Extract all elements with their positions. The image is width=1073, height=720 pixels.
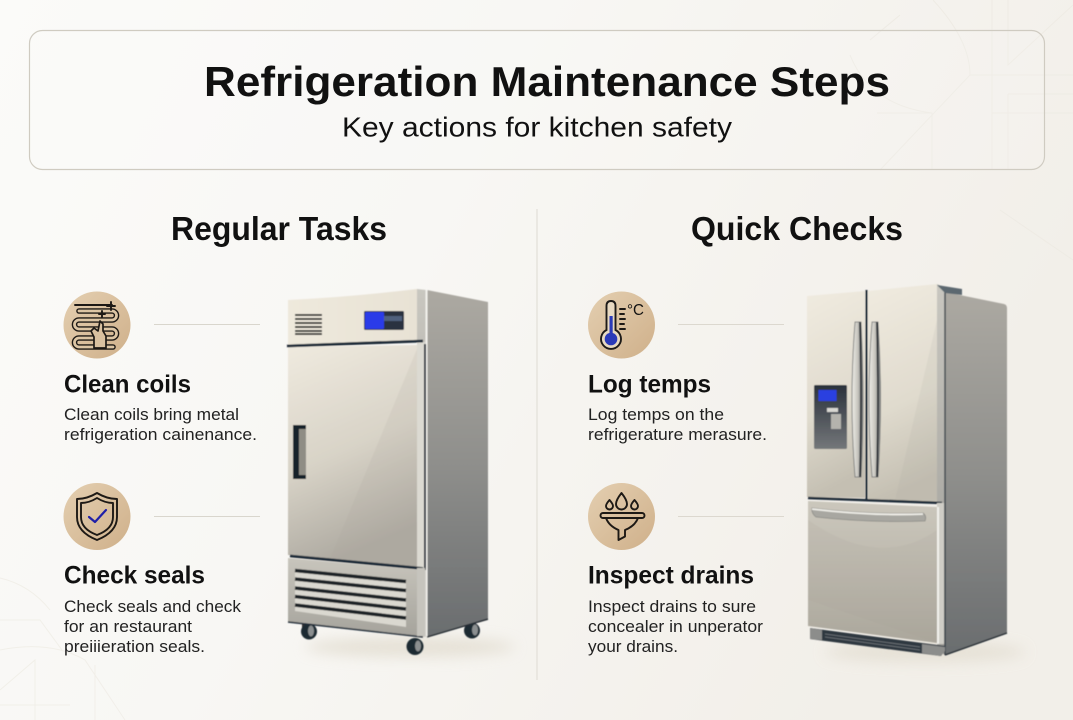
icon: shield with check xyxy=(64,483,130,550)
drawer handle xyxy=(812,508,926,522)
item title: Clean coils xyxy=(64,370,191,398)
item: Clean coils xyxy=(64,292,260,444)
icon: thermometer xyxy=(588,292,655,358)
horizontal divider xyxy=(808,498,942,503)
item description: Check seals and check xyxy=(64,598,242,616)
door handles xyxy=(852,322,880,477)
background line pattern: right xyxy=(1000,210,1073,260)
vent xyxy=(295,315,322,334)
icon: coils and hand xyxy=(64,292,130,358)
casters xyxy=(301,620,480,655)
connector line xyxy=(154,516,260,517)
item: Inspect drains xyxy=(588,483,784,656)
heading: Regular Tasks: Regular Tasks xyxy=(171,210,387,247)
heading: Quick Checks: Quick Checks xyxy=(691,210,903,247)
top panel xyxy=(288,289,417,346)
item description: for an restaurant xyxy=(64,618,192,636)
side panel xyxy=(427,290,488,637)
side panel xyxy=(945,292,1007,655)
centre divider xyxy=(536,209,538,680)
door handle xyxy=(293,425,306,479)
item: Log temps xyxy=(588,292,784,444)
item description: Inspect drains to sure xyxy=(588,598,756,616)
connector line xyxy=(154,324,260,325)
control display xyxy=(364,311,404,330)
item description: concealer in unperator xyxy=(588,618,764,636)
right upper door xyxy=(868,284,937,502)
title panel xyxy=(30,30,1044,170)
left upper door xyxy=(807,291,865,498)
item: Check seals xyxy=(64,483,260,656)
icon: drain funnel and drops xyxy=(588,483,655,550)
title: Refrigeration Maintenance Steps xyxy=(204,58,890,105)
illustration: french door refrigerator xyxy=(807,284,1025,662)
background line pattern: top right xyxy=(850,0,1073,170)
connector line xyxy=(678,516,784,517)
item description: Log temps on the xyxy=(588,406,724,424)
lower grille panel xyxy=(288,558,423,637)
item description: refrigerature merasure. xyxy=(588,426,767,444)
lower drawer xyxy=(808,501,937,643)
base grille xyxy=(810,628,945,656)
icon: thermometer: °C xyxy=(627,302,644,319)
item description: your drains. xyxy=(588,638,678,656)
item description: Clean coils bring metal xyxy=(64,406,239,424)
item title: Check seals xyxy=(64,562,205,590)
item title: Inspect drains xyxy=(588,562,754,590)
illustration: commercial refrigerator xyxy=(287,289,515,657)
background line pattern: bottom left xyxy=(0,578,125,720)
door split xyxy=(865,290,868,500)
connector line xyxy=(678,324,784,325)
subtitle: Key actions for kitchen safety xyxy=(342,112,732,142)
item description: preiiieration seals. xyxy=(64,638,205,656)
water dispenser xyxy=(814,385,847,449)
door xyxy=(288,345,417,567)
item title: Log temps xyxy=(588,370,711,398)
item description: refrigeration cainenance. xyxy=(64,426,257,444)
